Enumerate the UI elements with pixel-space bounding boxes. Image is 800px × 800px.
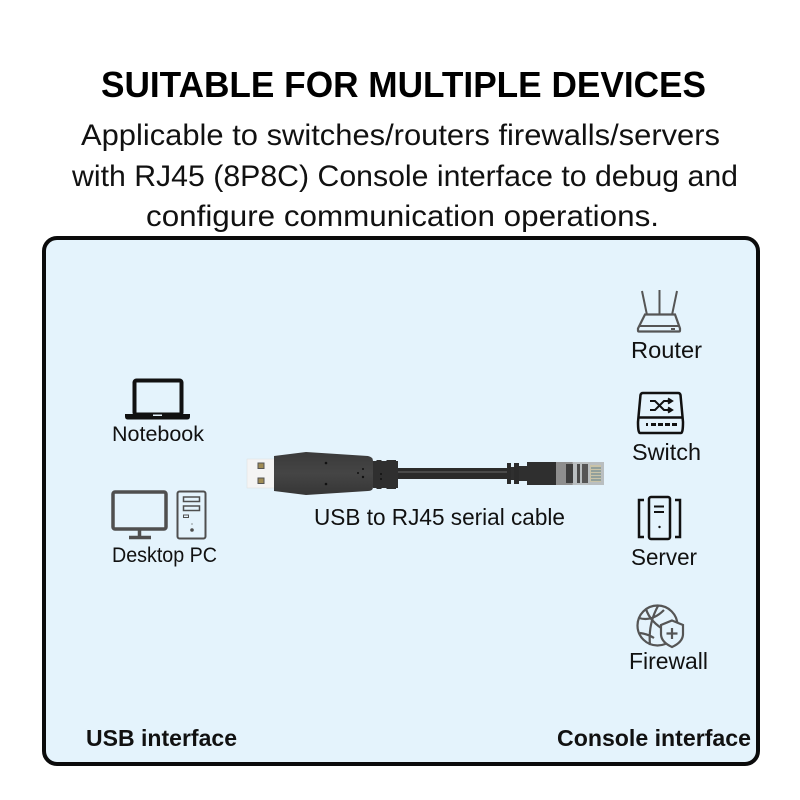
label: firewall: Firewall xyxy=(629,648,708,674)
label: USB interface: USB interface xyxy=(86,725,237,751)
label: server: Server xyxy=(631,544,697,570)
panel: connection diagram xyxy=(44,238,758,764)
image: USB to RJ45 cable xyxy=(247,452,604,495)
description text: with RJ45 (8P8C) Console interface to debug and xyxy=(71,160,738,193)
icon: firewall xyxy=(638,606,683,647)
label: switch: Switch xyxy=(632,439,701,465)
icon: notebook xyxy=(125,380,190,420)
icon: switch xyxy=(638,393,683,433)
icon: server xyxy=(639,497,680,539)
label: desktop PC: Desktop PC xyxy=(112,544,217,567)
description text: Applicable to switches/routers firewalls/servers xyxy=(81,119,720,152)
label: notebook: Notebook xyxy=(112,423,205,446)
icon: router xyxy=(638,290,680,332)
icon: desktop PC xyxy=(113,492,206,538)
label: Console interface: Console interface xyxy=(557,725,751,751)
label: cable: USB to RJ45 serial cable xyxy=(314,504,565,530)
label: router: Router xyxy=(631,337,702,363)
description text: configure communication operations. xyxy=(146,200,659,233)
title: SUITABLE FOR MULTIPLE DEVICES xyxy=(101,64,706,105)
description text xyxy=(71,119,738,233)
